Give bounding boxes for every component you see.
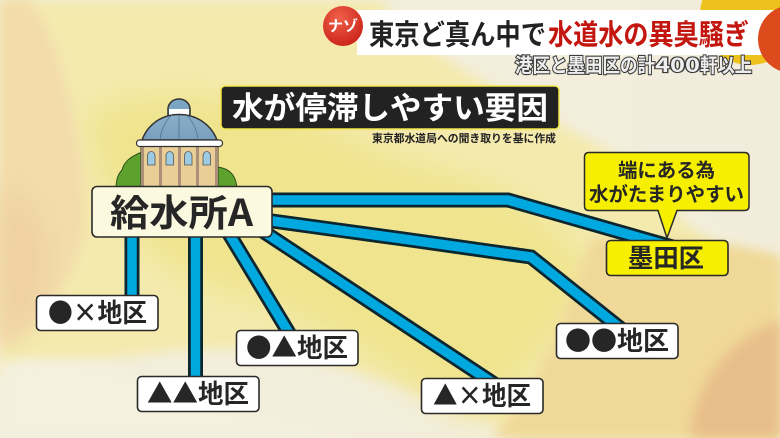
icon: water station building	[116, 99, 237, 190]
icon: main dome	[142, 114, 217, 140]
icon: walls	[141, 146, 218, 190]
pipe water	[132, 200, 690, 391]
headline text black: 東京ど真ん中で	[369, 12, 546, 54]
water station label: 給水所A	[110, 183, 253, 237]
pipes	[132, 200, 690, 391]
icon: windows	[148, 152, 210, 165]
badge	[323, 6, 363, 46]
icon: cornice	[136, 140, 222, 146]
badge: ナゾ	[328, 15, 358, 36]
source note: 東京都水道局への聞き取りを基に作成	[372, 130, 556, 146]
icon: dome ribs	[160, 115, 198, 140]
callout: 水がたまりやすい	[589, 178, 744, 207]
icon: columns	[141, 146, 218, 190]
subtitle: 軒以上	[700, 49, 752, 78]
icon: trees	[116, 152, 237, 190]
icon: lantern dome	[168, 99, 190, 115]
pipe outlines	[132, 200, 690, 391]
headline text red: 水道水の異臭騒ぎ	[548, 12, 749, 54]
decorative red circle	[758, 5, 780, 73]
subtitle	[515, 49, 752, 78]
headline bar	[357, 10, 780, 55]
label: Sumida ward: 墨田区	[628, 238, 704, 275]
callout: 端にある為	[618, 154, 715, 183]
subtitle: 港区と墨田区の計	[515, 49, 655, 78]
label: sankaku sankaku district: ▲▲地区	[147, 374, 249, 411]
callout	[584, 152, 749, 238]
label: sankaku batsu district: ▲×地区	[433, 376, 531, 413]
label: maru batsu district: ●×地区	[48, 293, 147, 330]
label: Sumida ward	[606, 238, 728, 276]
heading panel: 水が停滞しやすい要因	[232, 83, 548, 128]
label: maru sankaku district: ●▲地区	[246, 328, 348, 365]
label: maru maru district: ●●地区	[565, 321, 669, 358]
subtitle: 400	[655, 49, 700, 78]
decorative yellow circle	[700, 0, 780, 65]
